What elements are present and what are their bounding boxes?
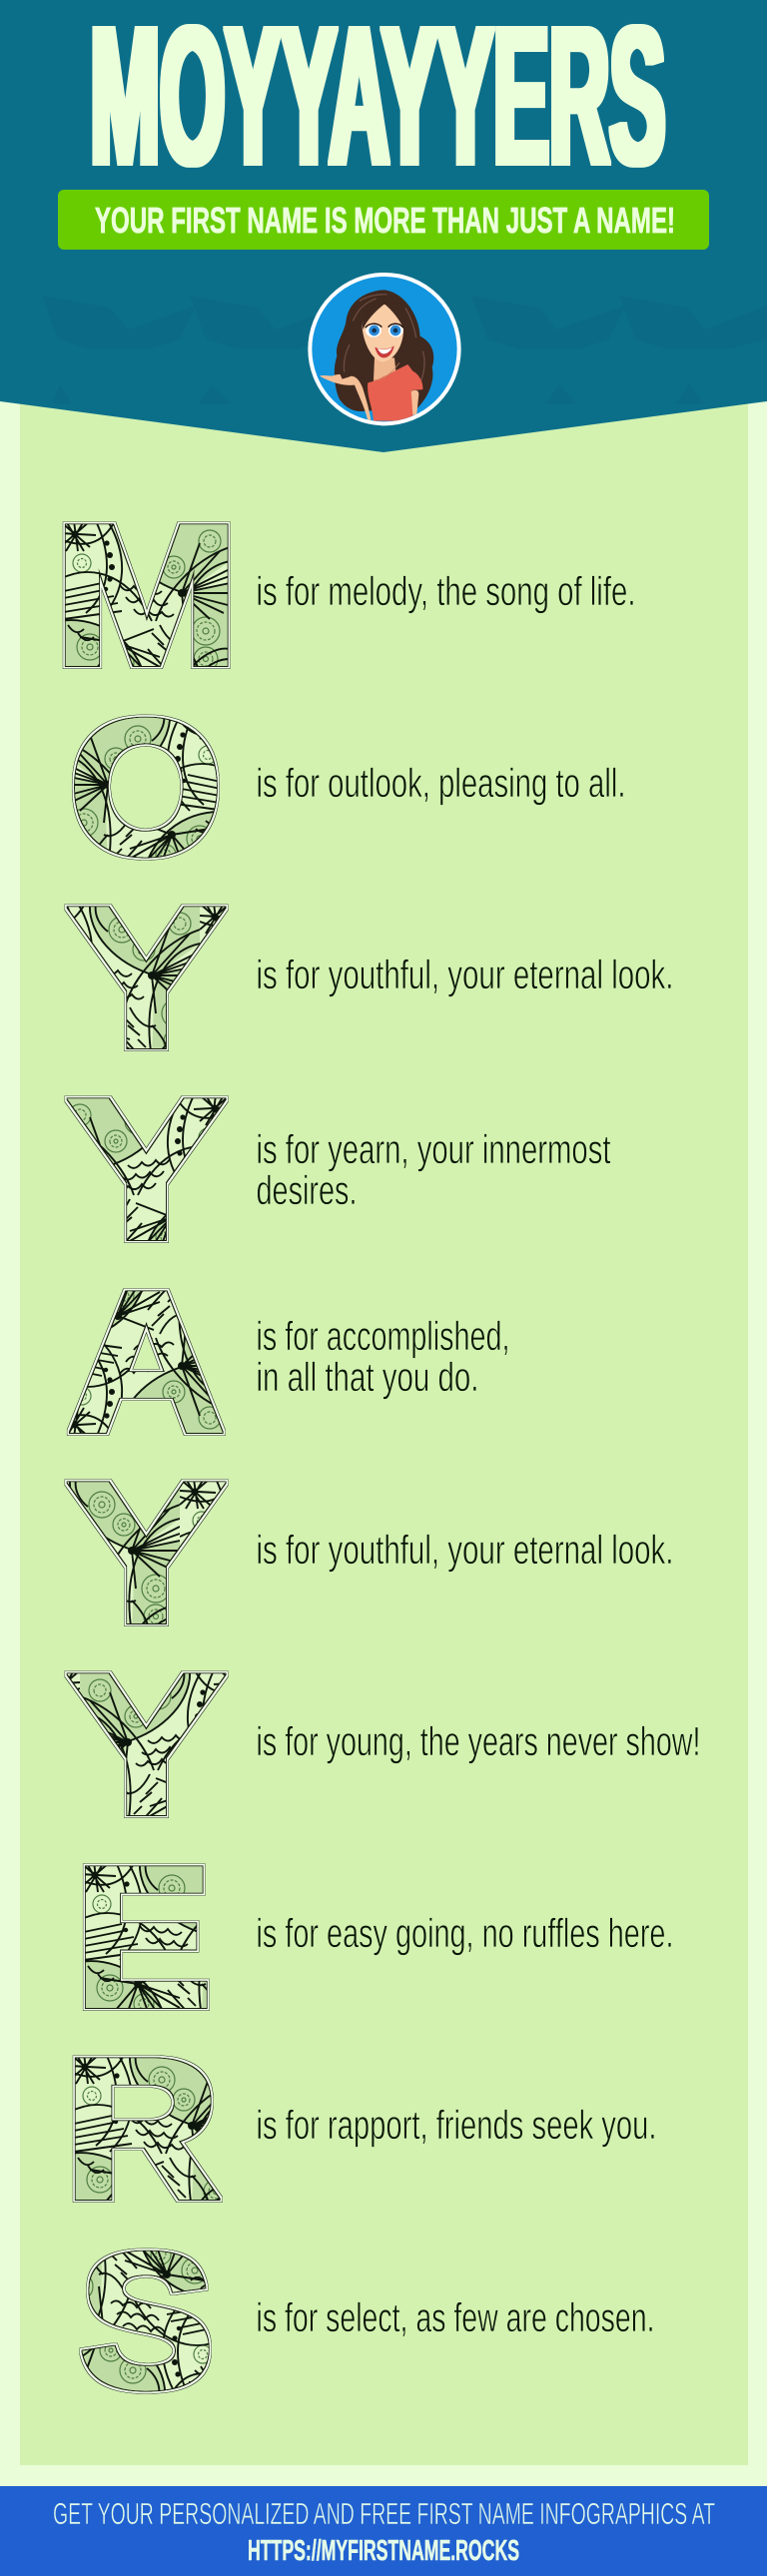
- row: E: [74, 1826, 674, 2049]
- row: Y youthful second: Y: [68, 1442, 226, 1664]
- row: S: [79, 2214, 655, 2428]
- row: M: M: [53, 484, 240, 707]
- row: Y yearn: is for yearn, your innermost: [256, 1126, 611, 1172]
- row: Y youthful: [68, 867, 673, 1089]
- row: A: [68, 1251, 509, 1474]
- icon: avatar of smiling woman in a circle: [310, 275, 459, 423]
- row: R: [63, 2018, 656, 2241]
- row: S: S: [79, 2214, 215, 2428]
- panel: letter meanings background: [20, 394, 748, 2465]
- row: O: O: [69, 680, 223, 895]
- row: A: in all that you do.: [256, 1354, 479, 1400]
- row: O: is for outlook, pleasing to all.: [256, 760, 625, 806]
- row: Y yearn: [68, 1058, 611, 1281]
- row: Y yearn: Y: [68, 1058, 226, 1281]
- row: Y youthful: Y: [68, 867, 226, 1089]
- row: O: [69, 680, 625, 895]
- row: R: R: [63, 2018, 220, 2241]
- row: A: is for accomplished,: [256, 1313, 509, 1359]
- header banner: [0, 0, 767, 452]
- row: Y young: Y: [68, 1633, 226, 1856]
- footer bar: [0, 2486, 767, 2576]
- row: Y youthful second: [68, 1442, 673, 1664]
- row: E: E: [74, 1826, 213, 2049]
- footer bar: HTTPS://MYFIRSTNAME.ROCKS: [248, 2535, 519, 2567]
- subtitle banner: [58, 190, 709, 250]
- row: M: [53, 484, 635, 707]
- row: A: A: [68, 1251, 226, 1474]
- row: Y yearn: desires.: [256, 1167, 358, 1213]
- row: Y young: [68, 1633, 701, 1856]
